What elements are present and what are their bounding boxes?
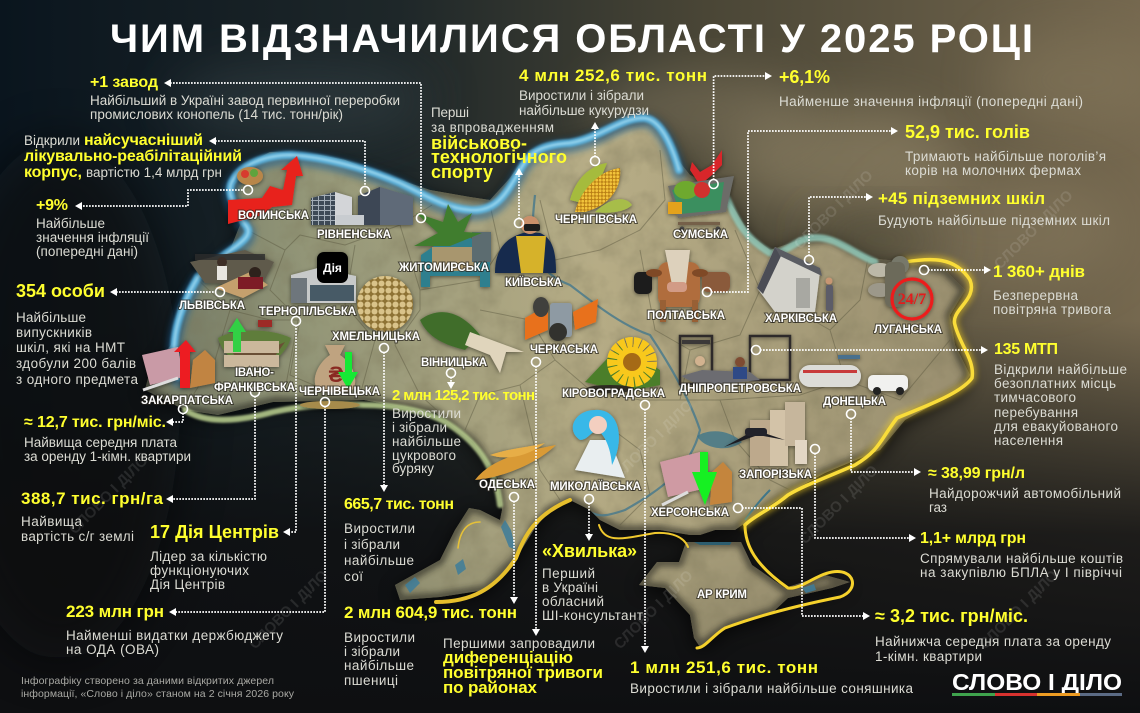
callout: sugar beet (392, 387, 535, 476)
callout: temporary stay places (994, 341, 1127, 448)
callout: alert differentiation: Першими запровадили (443, 636, 595, 651)
oblast labels: ЖИТОМИРСЬКА (398, 262, 489, 274)
callout: lowest inflation: +6,1% (779, 67, 830, 87)
callout: dairy cows: 52,9 тис. голів (905, 122, 1030, 142)
oblast labels: ВІННИЦЬКА (421, 357, 487, 369)
icon: sugar beet, Vinnytsia (420, 312, 524, 373)
callout: highest inflation: +9% (36, 197, 68, 214)
callout: military tech sport: за впровадженням (431, 120, 554, 135)
callout: alert differentiation: диференціацію (443, 648, 573, 667)
callout: wheat: 2 млн 604,9 тис. тонн (344, 603, 517, 622)
callout: LPG price: ≈ 38,99 грн/л (928, 465, 1025, 482)
callout: corn harvest: 4 млн 252,6 тис. тонн (519, 66, 707, 85)
icon: banknote, house and green arrow, Kherson (660, 452, 732, 505)
callout: farmland price: вартість с/г землі (21, 529, 134, 544)
callout: sugar beet: найбільше (392, 434, 461, 449)
callout: highest inflation: Найбільше (36, 216, 105, 231)
callout: Khvylka AI consultant (542, 541, 643, 623)
callout: sunflower (630, 658, 913, 696)
callout: sugar beet: цукрового (392, 448, 456, 463)
callout: Khvylka AI consultant: в Україні (542, 580, 598, 595)
callout: highest rent (24, 414, 191, 464)
watermarks (66, 167, 1077, 653)
callout: hemp plant: +1 завод (90, 74, 158, 91)
callout: lowest inflation: Найменше значення інфляції (попередні дані) (779, 94, 1083, 109)
oblast labels: ЛУГАНСЬКА (874, 324, 942, 336)
icon: money bag, coins and green arrow, Chernivtsi (300, 345, 360, 409)
callout: underground schools: +45 підземних шкіл (878, 189, 1045, 208)
callout: highest inflation: значення інфляції (36, 230, 149, 245)
callout: sugar beet: 2 млн 125,2 тис. тонн (392, 387, 535, 404)
callout: rehabilitation building: Відкрили (24, 133, 80, 148)
callout: corn harvest (519, 66, 707, 118)
callout: continuous alert: повітряна тривога (993, 302, 1111, 317)
callout: sunflower: 1 млн 251,6 тис. тонн (630, 658, 818, 677)
icon: sunflower, Kirovohrad (585, 343, 660, 393)
callout: hemp plant: промислових конопель (14 тис. тонн/рік) (90, 107, 343, 122)
oblast labels: ДНІПРОПЕТРОВСЬКА (679, 383, 801, 395)
icon: air-raid sirens with 24/7, Luhansk: 24/7 (898, 291, 926, 308)
yellow ribbon along east and south coasts (185, 260, 972, 648)
oblast labels: СУМСЬКА (673, 229, 728, 241)
callout: NMT graduates: здобули 200 балів (16, 356, 136, 371)
oblast labels: АР КРИМ (697, 589, 747, 601)
callout: sugar beet: буряку (392, 461, 434, 476)
watermarks: СЛОВО І ДІЛО (991, 187, 1077, 273)
callout: rehabilitation building: корпус, (24, 164, 82, 181)
callout: temporary stay places: для евакуйованого (994, 419, 1118, 434)
callout: Khvylka AI consultant: ШІ-консультант (542, 608, 643, 623)
callout: military tech sport: технологічного (431, 147, 567, 167)
callout: alert differentiation (443, 636, 603, 697)
oblast labels: КИЇВСЬКА (505, 276, 562, 289)
callout: farmland price: 388,7 тис. грн/га (21, 489, 164, 508)
callout: farmland price (21, 489, 164, 544)
callout: sugar beet: і зібрали (392, 420, 447, 435)
callout: highest rent: за оренду 1-кімн. квартири (24, 449, 191, 464)
oblast labels: ЗАКАРПАТСЬКА (141, 395, 233, 407)
callout: lowest budget spending: Найменші видатки держбюджету (66, 628, 283, 643)
oblast labels (141, 210, 942, 601)
icon: Diia centre building and logo, Ternopil: Дія (323, 261, 342, 275)
icon: money bag, coins and green arrow, Chernivtsi: ₴ (329, 362, 344, 387)
connectors (75, 72, 991, 653)
icon: Diia centre building and logo, Ternopil (291, 252, 356, 303)
watermarks: СЛОВО І ДІЛО (976, 567, 1062, 653)
oblast labels: ДОНЕЦЬКА (823, 396, 886, 408)
watermarks: СЛОВО І ДІЛО (246, 567, 332, 653)
callout: Diia centres (150, 522, 279, 592)
callout: wheat (344, 603, 517, 688)
callout: military tech sport: спорту (431, 162, 493, 182)
callout: temporary stay places: безоплатних місць (994, 376, 1116, 391)
oblast labels: ЛЬВІВСЬКА (179, 300, 245, 312)
callout: drones spending (920, 530, 1123, 580)
oblast labels: ТЕРНОПІЛЬСЬКА (259, 306, 356, 318)
footer source note: інформації, «Слово і діло» станом на 2 січня 2026 року (21, 688, 295, 700)
icon: banknote, house and red arrow, Zakarpattia (142, 340, 215, 390)
callout: wheat: Виростили (344, 630, 415, 645)
watermarks: СЛОВО І ДІЛО (611, 567, 697, 653)
footer source note (21, 675, 295, 700)
callout: dairy cows (905, 122, 1106, 178)
icon: air-raid sirens with 24/7, Luhansk (868, 256, 932, 319)
callout: lowest rent: Найнижча середня плата за оренду (875, 634, 1111, 649)
icon: man with binoculars, Kyiv (495, 216, 556, 273)
callout: dairy cows: Тримають найбільше поголів’я (905, 149, 1106, 164)
callout: highest rent: Найвища середня плата (24, 435, 177, 450)
icon: underground school shelter, Kharkiv (757, 247, 833, 312)
callout: lowest rent (875, 606, 1111, 664)
callout: farmland price: Найвища (21, 514, 82, 529)
callout: corn harvest: найбільше кукурудзи (519, 103, 649, 118)
callout: underground schools (878, 189, 1110, 228)
callout: underground schools: Будують найбільше підземних шкіл (878, 213, 1110, 228)
icon: soy beans pile, Khmelnytskyi (357, 276, 413, 332)
oblast labels: РІВНЕНСЬКА (317, 229, 391, 241)
callout: soy: сої (344, 569, 363, 584)
callout: rehabilitation building: вартістю 1,4 млрд грн (86, 165, 222, 180)
callout: LPG price: газ (929, 500, 947, 515)
oblast labels: ХАРКІВСЬКА (765, 313, 837, 325)
callout: Diia centres: Дія Центрів (150, 577, 225, 592)
callout: highest rent: ≈ 12,7 тис. грн/міс. (24, 414, 166, 431)
callout: continuous alert: 1 360+ днів (993, 262, 1085, 281)
icon: farmland, money and green arrow, Ivano-Frankivsk (218, 318, 291, 367)
callout: alert differentiation: повітряної тривоги (443, 663, 603, 682)
callout: lowest budget spending (66, 602, 283, 657)
callout: rehabilitation building (24, 132, 242, 181)
callout: highest inflation (36, 197, 149, 259)
callout: Khvylka AI consultant: «Хвилька» (542, 541, 637, 561)
watermarks: СЛОВО І ДІЛО (791, 167, 877, 253)
icon: rehabilitation building, Rivne (311, 187, 413, 225)
callout: corn harvest: Виростили і зібрали (519, 88, 644, 103)
callout: soy: найбільше (344, 553, 414, 568)
callout: drones spending: на закупівлю БПЛА у І півріччі (920, 565, 1122, 580)
logo: СЛОВО І ДІЛО (952, 669, 1122, 695)
watermarks: СЛОВО І ДІЛО (611, 397, 697, 483)
callout: lowest budget spending: на ОДА (ОВА) (66, 642, 159, 657)
icon: AI consultant Khvylka, Mykolaiv (573, 410, 625, 478)
callout: Diia centres: 17 Дія Центрів (150, 522, 279, 542)
callout: rehabilitation building: лікувально-реабілітаційний (24, 148, 242, 165)
title: ЧИМ ВІДЗНАЧИЛИСЯ ОБЛАСТІ У 2025 РОЦІ (110, 17, 1033, 61)
icon: wheat, Odesa (475, 443, 556, 480)
oblast labels: ОДЕСЬКА (479, 479, 535, 491)
callout: sugar beet: Виростили (392, 406, 461, 421)
callout: alert differentiation: по районах (443, 678, 538, 697)
callout: NMT graduates (16, 281, 138, 387)
oblast labels: ІВАНО- (235, 367, 274, 379)
icon: students at desks, Lviv (190, 250, 274, 298)
callout: hemp plant (90, 74, 400, 122)
footer source note: Інфографіку створено за даними відкритих джерел (21, 675, 274, 687)
icon: LPG tank and car, Donetsk (799, 355, 908, 395)
callout: NMT graduates: з одного предмета (16, 372, 138, 387)
callout: Khvylka AI consultant: обласний (542, 594, 604, 609)
icon: shopping cart, Sumy (668, 150, 734, 232)
oblast labels: ЧЕРНІГІВСЬКА (555, 214, 637, 226)
callout: NMT graduates: випускників (16, 325, 92, 340)
icon: orange loudspeakers, Cherkasy (525, 297, 598, 341)
callout: NMT graduates: Найбільше (16, 310, 86, 325)
watermarks: СЛОВО І ДІЛО (796, 462, 882, 548)
oblast labels: МИКОЛАЇВСЬКА (550, 480, 641, 493)
oblast labels: ХЕРСОНСЬКА (651, 507, 729, 519)
oblast labels: ПОЛТАВСЬКА (647, 310, 725, 322)
callout: soy (344, 496, 454, 584)
map of Ukraine (130, 110, 990, 660)
callout: Diia centres: функціонуючих (150, 563, 249, 578)
callout: soy: і зібрали (344, 537, 400, 552)
callout: LPG price (928, 465, 1121, 515)
callout: lowest rent: ≈ 3,2 тис. грн/міс. (875, 606, 1028, 626)
callout: sunflower: Виростили і зібрали найбільше соняшника (630, 681, 913, 696)
icon: money stacks and drone, Zaporizhzhia (724, 402, 807, 466)
icon: dairy cows, Poltava (634, 250, 730, 322)
callout: temporary stay places: тимчасового (994, 390, 1076, 405)
icon: hemp leaf and machine, Zhytomyr (414, 204, 491, 287)
oblast labels: ХМЕЛЬНИЦЬКА (332, 331, 420, 343)
callout: lowest inflation (779, 67, 1083, 109)
callout: soy: Виростили (344, 521, 415, 536)
callout: military tech sport: Перші (431, 105, 469, 120)
callout: highest inflation: (попередні дані) (36, 244, 138, 259)
oblast labels: ЧЕРНІВЕЦЬКА (299, 386, 380, 398)
callout: military tech sport (431, 105, 567, 182)
callout: continuous alert: Безперервна (993, 288, 1078, 303)
oblast labels: КІРОВОГРАДСЬКА (562, 388, 665, 400)
callout: wheat: найбільше (344, 658, 414, 673)
oblast labels: ЗАПОРІЗЬКА (739, 469, 812, 481)
callout: temporary stay places: 135 МТП (994, 341, 1058, 358)
callout: LPG price: Найдорожчий автомобільний (929, 486, 1121, 501)
callout: Khvylka AI consultant: Перший (542, 566, 595, 581)
callout: dairy cows: корів на молочних фермах (905, 163, 1081, 178)
callout: military tech sport: військово- (431, 133, 527, 153)
callout: rehabilitation building: найсучасніший (84, 132, 203, 149)
icon: red inflation arrow, Volyn (228, 156, 303, 224)
callout: wheat: пшениці (344, 673, 398, 688)
oblast labels: ФРАНКІВСЬКА (214, 382, 295, 394)
callout: soy: 665,7 тис. тонн (344, 496, 454, 513)
callout: lowest budget spending: 223 млн грн (66, 602, 164, 621)
callout: Diia centres: Лідер за кількістю (150, 549, 267, 564)
oblast labels: ЧЕРКАСЬКА (530, 344, 598, 356)
callout: continuous alert (993, 262, 1111, 317)
icon: bunk beds, Dnipropetrovsk (680, 336, 790, 386)
callout: NMT graduates: 354 особи (16, 281, 105, 301)
watermarks: СЛОВО І ДІЛО (66, 452, 152, 538)
callout: lowest rent: 1-кімн. квартири (875, 649, 982, 664)
blue river ribbon along north border (174, 118, 875, 380)
callout: temporary stay places: населення (994, 433, 1063, 448)
callout: NMT graduates: шкіл, які на НМТ (16, 340, 125, 355)
callout: drones spending: 1,1+ млрд грн (920, 530, 1026, 547)
callout: drones spending: Спрямували найбільше коштів (920, 551, 1123, 566)
icon: corn, Chernihiv (570, 163, 632, 213)
callout: hemp plant: Найбільший в Україні завод первинної переробки (90, 93, 400, 108)
callout: temporary stay places: Відкрили найбільше (994, 362, 1127, 377)
callout: temporary stay places: перебування (994, 405, 1078, 420)
oblast labels: ВОЛИНСЬКА (238, 210, 309, 222)
callout: wheat: і зібрали (344, 644, 400, 659)
